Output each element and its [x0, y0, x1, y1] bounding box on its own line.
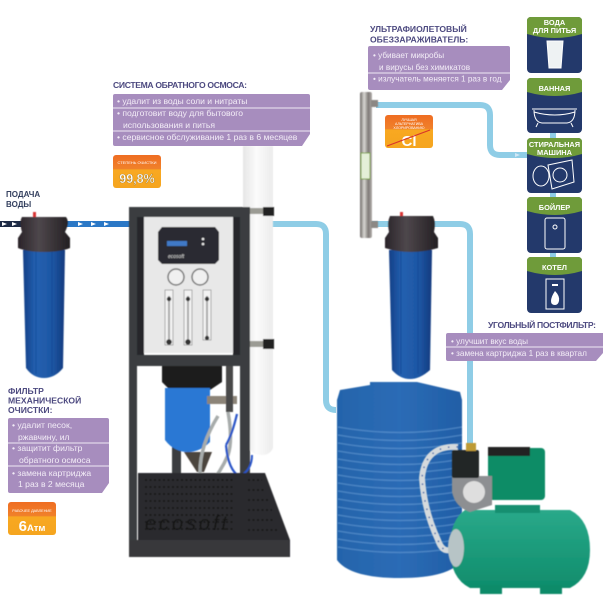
badge: working pressure [8, 502, 56, 535]
badge: chlorine alternative: АЛЬТЕРНАТИВА [395, 122, 424, 126]
panel: reverse osmosis: • удалит из воды соли и нитраты [117, 96, 247, 106]
vessel end flange [448, 529, 464, 567]
RO system [129, 146, 290, 557]
icon: washing machine [533, 160, 574, 189]
carbon post filter [385, 212, 438, 379]
base tray [129, 473, 290, 557]
badge: chlorine alternative: ХЛОРИРОВАНИЮ [393, 126, 425, 130]
icon: glass [547, 41, 563, 68]
panel: carbon post filter: • улучшит вкус воды [451, 337, 528, 346]
card: heating boiler: КОТЕЛ [542, 263, 567, 272]
heading: УГОЛЬНЫЙ ПОСТФИЛЬТР: [488, 319, 596, 330]
controller box [158, 227, 219, 264]
badge: chlorine alternative: Cl [402, 133, 416, 150]
support post [172, 440, 181, 475]
prefilter housing in frame [162, 366, 237, 472]
panel: mechanical filter: • защитит фильтр [12, 443, 83, 453]
panel: mechanical filter: • удалит песок, [12, 420, 72, 430]
badge: purification: 99,8% [119, 172, 155, 186]
card: heating boiler [527, 257, 582, 313]
switch box [452, 450, 479, 478]
inlet pipe [0, 221, 130, 227]
heading: СИСТЕМА ОБРАТНОГО ОСМОСА: [113, 80, 247, 90]
card: drinking water: ДЛЯ ПИТЬЯ [533, 26, 576, 35]
heading: МЕХАНИЧЕСКОЙ [8, 394, 81, 406]
card: boiler: БОЙЛЕР [539, 203, 570, 212]
panel: mechanical filter: ржавчину, ил [18, 432, 70, 442]
controller box: ecosoft [168, 254, 185, 260]
panel: UV [368, 23, 510, 90]
tank ribs [338, 427, 462, 552]
storage tank [337, 382, 462, 578]
icon: furnace [546, 279, 564, 309]
pressure vessel [450, 510, 590, 588]
badge: chlorine alternative [385, 115, 433, 150]
card: boiler [527, 197, 582, 253]
hoses [200, 412, 252, 487]
pipe arrow [515, 153, 520, 157]
panel: mechanical filter: • замена картриджа [12, 468, 91, 478]
panel: mechanical filter: обратного осмоса [19, 455, 91, 465]
UV sterilizer [360, 92, 378, 238]
heading: ОЧИСТКИ: [8, 405, 53, 415]
column clamps [250, 207, 274, 349]
tray logo: ecosoft [145, 513, 228, 535]
heading: УЛЬТРАФИОЛЕТОВЫЙ [370, 23, 467, 34]
card: drinking water [527, 17, 582, 73]
heading: ОБЕЗЗАРАЖИВАТЕЛЬ: [370, 34, 468, 44]
card: bathroom [527, 78, 582, 133]
pump station [422, 443, 590, 594]
panel: reverse osmosis: • сервисное обслуживание 1 раз в 6 месяцев [117, 132, 298, 142]
card: washing machine [527, 138, 582, 193]
card: bathroom: ВАННАЯ [539, 84, 570, 93]
heading: ФИЛЬТР [8, 386, 44, 396]
panel: mechanical filter [8, 386, 109, 493]
card: washing machine: СТИРАЛЬНАЯ [529, 140, 580, 149]
badge: working pressure: 6Атм [19, 518, 45, 535]
control panel plate [144, 217, 233, 353]
pressure gauges [168, 269, 208, 285]
panel: UV: • убивает микробы [373, 51, 444, 60]
icon: bathtub [532, 109, 577, 127]
panel: UV: и вирусы без химикатов [379, 63, 470, 72]
panel: carbon post filter [446, 319, 603, 361]
light blue pipes [272, 105, 553, 445]
card: washing machine: МАШИНА [537, 148, 573, 157]
badge: working pressure: РАБОЧЕЕ ДАВЛЕНИЕ [12, 509, 52, 513]
badge: purification: СТЕПЕНЬ ОЧИСТКИ [117, 160, 157, 165]
mechanical filter [18, 212, 70, 378]
heading: water supply: ВОДЫ [6, 200, 31, 209]
panel: mechanical filter: 1 раз в 2 месяца [18, 479, 85, 489]
icon: boiler [545, 218, 565, 249]
hose [422, 447, 458, 550]
membrane column [243, 146, 273, 455]
badge: purification [113, 155, 161, 188]
panel: reverse osmosis: использования и питья [123, 120, 215, 130]
card: drinking water: ВОДА [544, 18, 566, 27]
panel: reverse osmosis: • подготовит воду для бытового [117, 108, 243, 118]
metal frame [129, 207, 250, 557]
panel: UV: • излучатель меняется 1 раз в год [373, 74, 502, 84]
panel: reverse osmosis [113, 80, 310, 146]
heading: water supply: ПОДАЧА [6, 190, 40, 199]
stainless pump head [452, 476, 492, 512]
flow meters [165, 290, 211, 345]
motor [488, 448, 545, 500]
panel: carbon post filter: • замена картриджа 1 раз в квартал [451, 349, 587, 358]
badge: chlorine alternative: ЛУЧШАЯ [401, 118, 417, 122]
